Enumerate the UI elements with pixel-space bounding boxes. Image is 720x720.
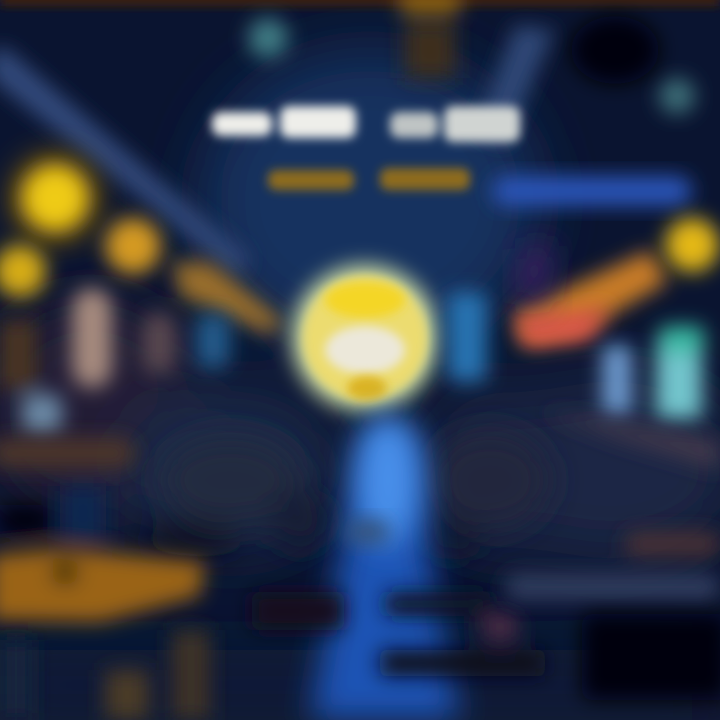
left table bbox=[0, 438, 205, 622]
blue panel right of badge bbox=[447, 292, 487, 382]
right bars bbox=[602, 326, 704, 419]
right table bbox=[505, 410, 720, 600]
left figures bbox=[0, 288, 230, 434]
title (illegible, blurred) bbox=[212, 106, 520, 142]
centre emoji badge bbox=[291, 264, 439, 412]
bottom right dark block bbox=[582, 614, 720, 700]
muted mottled areas beside the stream bbox=[140, 430, 550, 560]
right chart arrow bbox=[515, 218, 719, 346]
top centre lantern bbox=[400, 0, 460, 78]
bottom left posts bbox=[0, 630, 210, 720]
bottom centre tables bbox=[252, 592, 545, 676]
upper right diagonal beam bbox=[475, 25, 555, 145]
top edge warm stripe bbox=[0, 0, 720, 6]
blue banner bbox=[492, 176, 692, 206]
top orbs and dark patch bbox=[248, 16, 695, 114]
central blue stream bbox=[310, 414, 460, 720]
left yellow lamps bbox=[0, 156, 161, 297]
orange arrow left bbox=[172, 262, 285, 334]
left diagonal beam bbox=[0, 48, 250, 276]
subtitle (illegible, blurred) bbox=[268, 168, 470, 190]
